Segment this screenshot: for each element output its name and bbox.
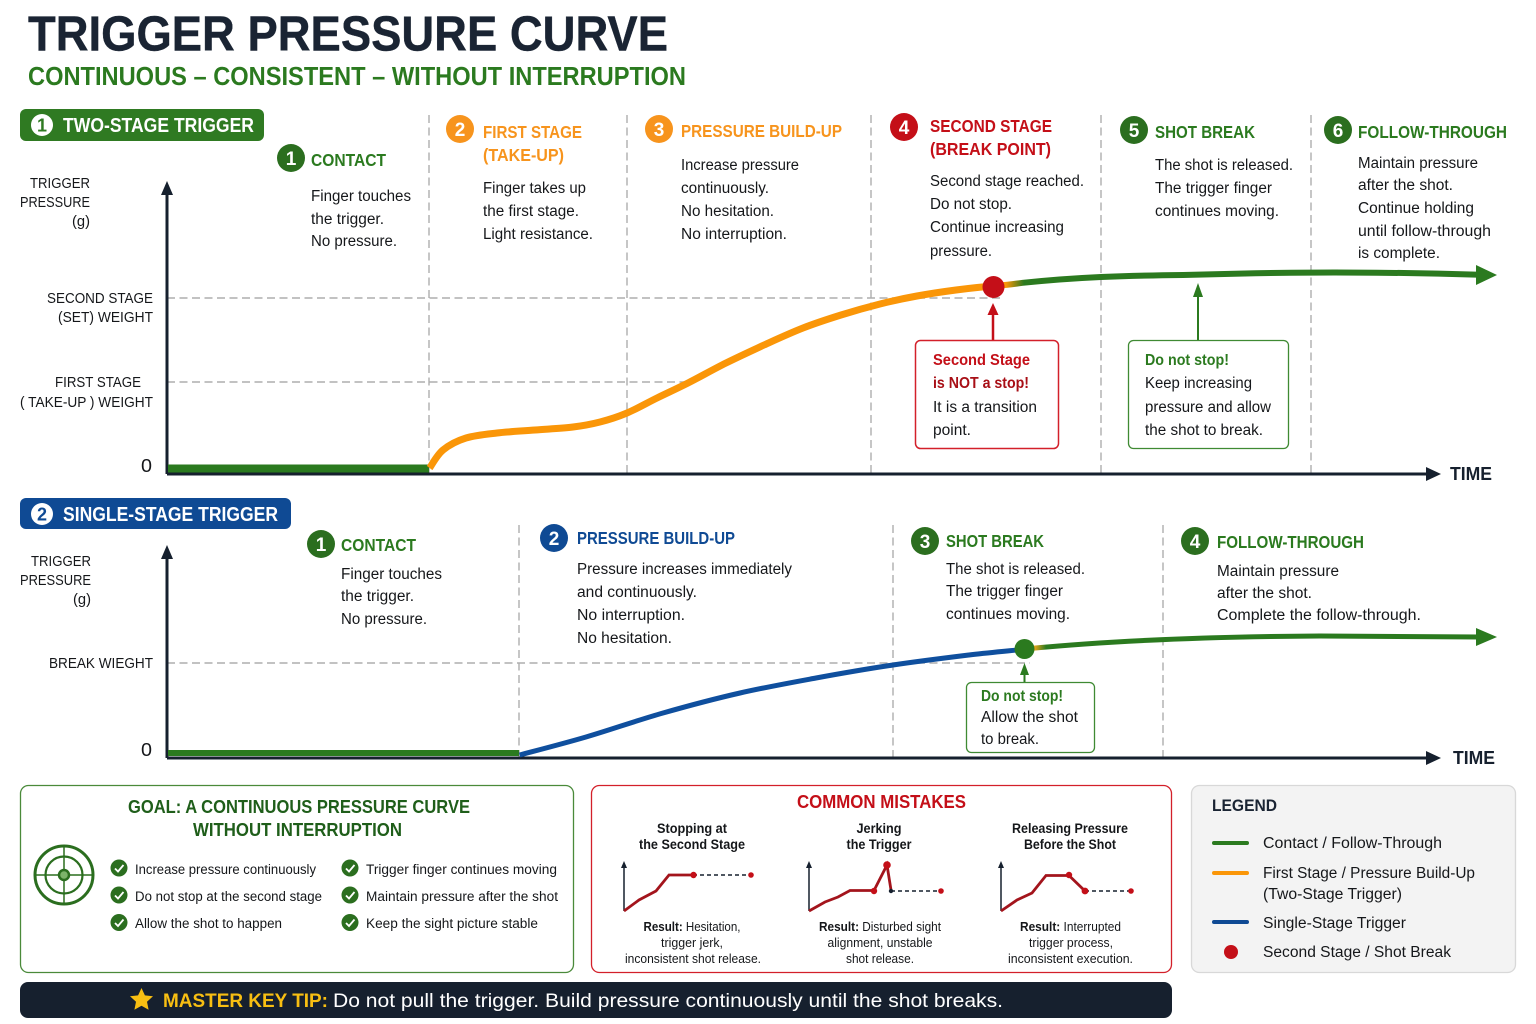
legend heading: LEGEND xyxy=(1212,796,1277,815)
callout: do not stop: Do not stop! xyxy=(1145,352,1229,369)
mistake: jerking the trigger: Result: Disturbed sight xyxy=(819,919,941,934)
step 6: follow-through: Continue holding xyxy=(1358,200,1474,217)
step 4: follow-through xyxy=(1181,527,1421,624)
axes xyxy=(161,181,1492,484)
mistake: stopping at the second stage: Stopping at xyxy=(657,821,727,836)
arrowhead xyxy=(1476,628,1497,646)
axes xyxy=(161,545,1495,768)
step 2: pressure build-up xyxy=(540,524,792,647)
step 1: contact: Finger touches xyxy=(311,188,411,205)
step 2: pressure build-up: No hesitation. xyxy=(577,630,672,647)
master key tip banner: MASTER KEY TIP: xyxy=(163,990,328,1012)
callout: second stage is not a stop: It is a transition xyxy=(933,399,1037,416)
badge: two-stage trigger: TWO-STAGE TRIGGER xyxy=(63,115,254,137)
step 4: second stage: Do not stop. xyxy=(930,196,1012,213)
checklist: Allow the shot to happen xyxy=(135,916,282,931)
mistake: releasing pressure before the shot: trigger process, xyxy=(1029,935,1113,950)
y axis labels: 0 xyxy=(141,455,152,476)
checklist xyxy=(110,860,558,931)
badge: single-stage trigger xyxy=(20,498,291,529)
mistake: releasing pressure before the shot: Before the Shot xyxy=(1024,837,1116,852)
y axis labels: FIRST STAGE xyxy=(55,375,141,391)
step 6: follow-through: FOLLOW-THROUGH xyxy=(1358,122,1507,142)
panel: goal xyxy=(20,786,574,972)
curve: shot break and follow-through xyxy=(1030,636,1480,648)
mistake: jerking the trigger: alignment, unstable xyxy=(828,935,932,950)
step 4: follow-through: Complete the follow-through. xyxy=(1217,607,1421,624)
step 3: pressure build-up: No hesitation. xyxy=(681,203,774,220)
badge: two-stage trigger xyxy=(20,109,264,141)
step 4: second stage: SECOND STAGE xyxy=(930,116,1052,136)
mistake: stopping at the second stage: the Second Stage xyxy=(639,837,745,852)
callout: second stage is not a stop xyxy=(916,303,1058,448)
panel: two-stage trigger chart xyxy=(20,109,1497,484)
axes: TIME xyxy=(1450,464,1492,484)
mistake: stopping at the second stage: trigger jerk, xyxy=(661,935,723,950)
y axis labels: (g) xyxy=(73,592,91,608)
step 2: first stage: 2 xyxy=(455,120,465,141)
panel: common mistakes xyxy=(592,786,1172,972)
step 1: contact xyxy=(307,530,442,628)
callout: do not stop, allow the shot: Allow the shot xyxy=(981,709,1079,726)
y axis labels: (g) xyxy=(72,214,90,230)
step 3: pressure build-up: Increase pressure xyxy=(681,157,799,174)
callout: do not stop, allow the shot xyxy=(966,663,1094,752)
step 4: follow-through: FOLLOW-THROUGH xyxy=(1217,532,1364,552)
step 2: first stage: Finger takes up xyxy=(483,180,586,197)
step 4: second stage: (BREAK POINT) xyxy=(930,139,1051,159)
step 5: shot break: 5 xyxy=(1129,121,1140,142)
step 2: first stage: Light resistance. xyxy=(483,226,593,243)
step 5: shot break xyxy=(1120,116,1293,220)
subtitle: CONTINUOUS – CONSISTENT – WITHOUT INTERRUPTION xyxy=(28,63,686,91)
goal heading: GOAL: A CONTINUOUS PRESSURE CURVE xyxy=(128,797,470,817)
legend: contact / follow-through: Contact / Follow-Through xyxy=(1263,835,1442,852)
legend: second stage / shot break: Second Stage / Shot Break xyxy=(1263,944,1451,961)
y axis labels xyxy=(20,176,153,476)
goal heading: WITHOUT INTERRUPTION xyxy=(193,820,402,840)
callout: do not stop: pressure and allow xyxy=(1145,399,1272,416)
step 3: shot break: The trigger finger xyxy=(946,583,1063,600)
callout: do not stop, allow the shot: Do not stop! xyxy=(981,688,1063,705)
step 3: pressure build-up: PRESSURE BUILD-UP xyxy=(681,121,842,141)
curve: pressure build-up xyxy=(520,648,1030,755)
mistake: jerking the trigger xyxy=(806,821,944,966)
badge: two-stage trigger: 1 xyxy=(37,116,47,136)
step 1: contact: the trigger. xyxy=(341,588,414,605)
mistakes heading: COMMON MISTAKES xyxy=(797,792,966,812)
step 4: second stage: 4 xyxy=(899,118,910,139)
axes: TIME xyxy=(1453,748,1495,768)
step 1: contact: the trigger. xyxy=(311,211,384,228)
curve: contact xyxy=(168,750,519,756)
y axis labels: PRESSURE xyxy=(20,195,90,211)
mistake: jerking the trigger: shot release. xyxy=(846,951,914,966)
icon: star xyxy=(130,988,153,1010)
y axis labels: SECOND STAGE xyxy=(47,291,153,307)
y axis labels: (SET) WEIGHT xyxy=(58,310,153,326)
step 5: shot break: The trigger finger xyxy=(1155,180,1272,197)
step 1: contact xyxy=(277,144,411,250)
mistake: releasing pressure before the shot: Releasing Pressure xyxy=(1012,821,1128,836)
gridlines xyxy=(167,525,1163,758)
badge: single-stage trigger: 2 xyxy=(37,504,47,524)
second stage point xyxy=(982,276,1004,298)
mistake: jerking the trigger: the Trigger xyxy=(846,837,912,852)
step 3: shot break: continues moving. xyxy=(946,606,1070,623)
step 1: contact: No pressure. xyxy=(341,611,427,628)
mistake: stopping at the second stage: inconsistent shot release. xyxy=(625,951,761,966)
step 3: pressure build-up: 3 xyxy=(654,120,664,141)
step 2: pressure build-up: Pressure increases immediately xyxy=(577,561,792,578)
checklist: Keep the sight picture stable xyxy=(366,916,538,931)
step 1: contact: CONTACT xyxy=(341,535,416,555)
step 1: contact: 1 xyxy=(316,535,327,556)
step 4: second stage: Continue increasing xyxy=(930,219,1064,236)
curve: contact xyxy=(168,464,429,472)
legend: first stage / pressure build-up: First Stage / Pressure Build-Up xyxy=(1263,865,1475,882)
icon: target xyxy=(35,846,93,904)
mistake: releasing pressure before the shot xyxy=(998,821,1134,966)
step 2: first stage: FIRST STAGE xyxy=(483,122,582,142)
step 1: contact: CONTACT xyxy=(311,150,386,170)
step 3: pressure build-up xyxy=(645,115,842,243)
callout: second stage is not a stop: Second Stage xyxy=(933,352,1030,369)
step 1: contact: Finger touches xyxy=(341,566,442,583)
step 6: follow-through: until follow-through xyxy=(1358,223,1491,240)
legend: single-stage trigger: Single-Stage Trigger xyxy=(1263,915,1406,932)
y axis labels: 0 xyxy=(141,739,152,760)
badge: single-stage trigger: SINGLE-STAGE TRIGGER xyxy=(63,504,278,526)
callout: do not stop, allow the shot: to break. xyxy=(981,731,1039,748)
step 6: follow-through: after the shot. xyxy=(1358,177,1453,194)
step 3: pressure build-up: No interruption. xyxy=(681,226,787,243)
step 5: shot break: The shot is released. xyxy=(1155,157,1293,174)
step 4: follow-through: Maintain pressure xyxy=(1217,563,1339,580)
checklist: Trigger finger continues moving xyxy=(366,862,557,877)
step 2: pressure build-up: PRESSURE BUILD-UP xyxy=(577,528,735,548)
y axis labels: TRIGGER xyxy=(31,554,91,570)
master key tip banner xyxy=(20,982,1172,1018)
step 6: follow-through: is complete. xyxy=(1358,245,1440,262)
step 6: follow-through xyxy=(1324,116,1507,262)
step 2: first stage: the first stage. xyxy=(483,203,579,220)
gridlines xyxy=(167,115,1311,474)
panel: single-stage trigger chart xyxy=(20,498,1497,768)
y axis labels: BREAK WIEGHT xyxy=(49,656,153,672)
step 2: first stage: (TAKE-UP) xyxy=(483,145,564,165)
mistake: stopping at the second stage: Result: Hesitation, xyxy=(644,919,740,934)
step 2: first stage xyxy=(446,115,593,243)
mistake: jerking the trigger: Jerking xyxy=(856,821,902,836)
arrowhead xyxy=(1476,265,1497,285)
curve: first stage and build-up xyxy=(430,286,1000,468)
callout: second stage is not a stop: is NOT a stop! xyxy=(933,375,1029,392)
checklist: Increase pressure continuously xyxy=(135,862,316,877)
step 4: follow-through: 4 xyxy=(1190,532,1201,553)
callout: do not stop: Keep increasing xyxy=(1145,375,1252,392)
shot break point xyxy=(1014,639,1034,659)
step 6: follow-through: 6 xyxy=(1333,121,1343,142)
step 5: shot break: SHOT BREAK xyxy=(1155,122,1255,142)
step 6: follow-through: Maintain pressure xyxy=(1358,155,1478,172)
callout: do not stop: the shot to break. xyxy=(1145,422,1263,439)
step 3: pressure build-up: continuously. xyxy=(681,180,769,197)
y axis labels: TRIGGER xyxy=(30,176,90,192)
step 1: contact: 1 xyxy=(286,149,297,170)
mistake: stopping at the second stage xyxy=(621,821,761,966)
step 4: second stage xyxy=(890,113,1084,260)
step 3: shot break: The shot is released. xyxy=(946,561,1085,578)
y axis labels: PRESSURE xyxy=(20,573,91,589)
goal heading xyxy=(128,797,470,840)
mistake: releasing pressure before the shot: Result: Interrupted xyxy=(1020,919,1121,934)
callout: second stage is not a stop: point. xyxy=(933,422,971,439)
panel: legend xyxy=(1192,786,1516,972)
step 5: shot break: continues moving. xyxy=(1155,203,1279,220)
legend: first stage / pressure build-up: (Two-Stage Trigger) xyxy=(1263,886,1402,903)
callout: do not stop xyxy=(1128,283,1288,448)
mistake: releasing pressure before the shot: inconsistent execution. xyxy=(1008,951,1133,966)
title: TRIGGER PRESSURE CURVE xyxy=(28,8,668,62)
step 3: shot break: 3 xyxy=(920,532,930,553)
legend: first stage / pressure build-up xyxy=(1212,865,1475,903)
checklist: Maintain pressure after the shot xyxy=(366,889,558,904)
step 4: second stage: Second stage reached. xyxy=(930,173,1084,190)
master key tip banner: Do not pull the trigger. Build pressure continuously until the shot breaks. xyxy=(333,990,1003,1012)
step 4: follow-through: after the shot. xyxy=(1217,585,1312,602)
curve: shot break and follow-through xyxy=(1000,272,1480,286)
step 2: pressure build-up: and continuously. xyxy=(577,584,697,601)
step 2: pressure build-up: No interruption. xyxy=(577,607,685,624)
step 1: contact: No pressure. xyxy=(311,233,397,250)
step 2: pressure build-up: 2 xyxy=(549,529,559,550)
step 3: shot break: SHOT BREAK xyxy=(946,531,1044,551)
y axis labels xyxy=(20,554,153,760)
checklist: Do not stop at the second stage xyxy=(135,889,322,904)
step 4: second stage: pressure. xyxy=(930,243,992,260)
y axis labels: ( TAKE-UP ) WEIGHT xyxy=(20,395,153,411)
step 3: shot break xyxy=(911,527,1085,623)
